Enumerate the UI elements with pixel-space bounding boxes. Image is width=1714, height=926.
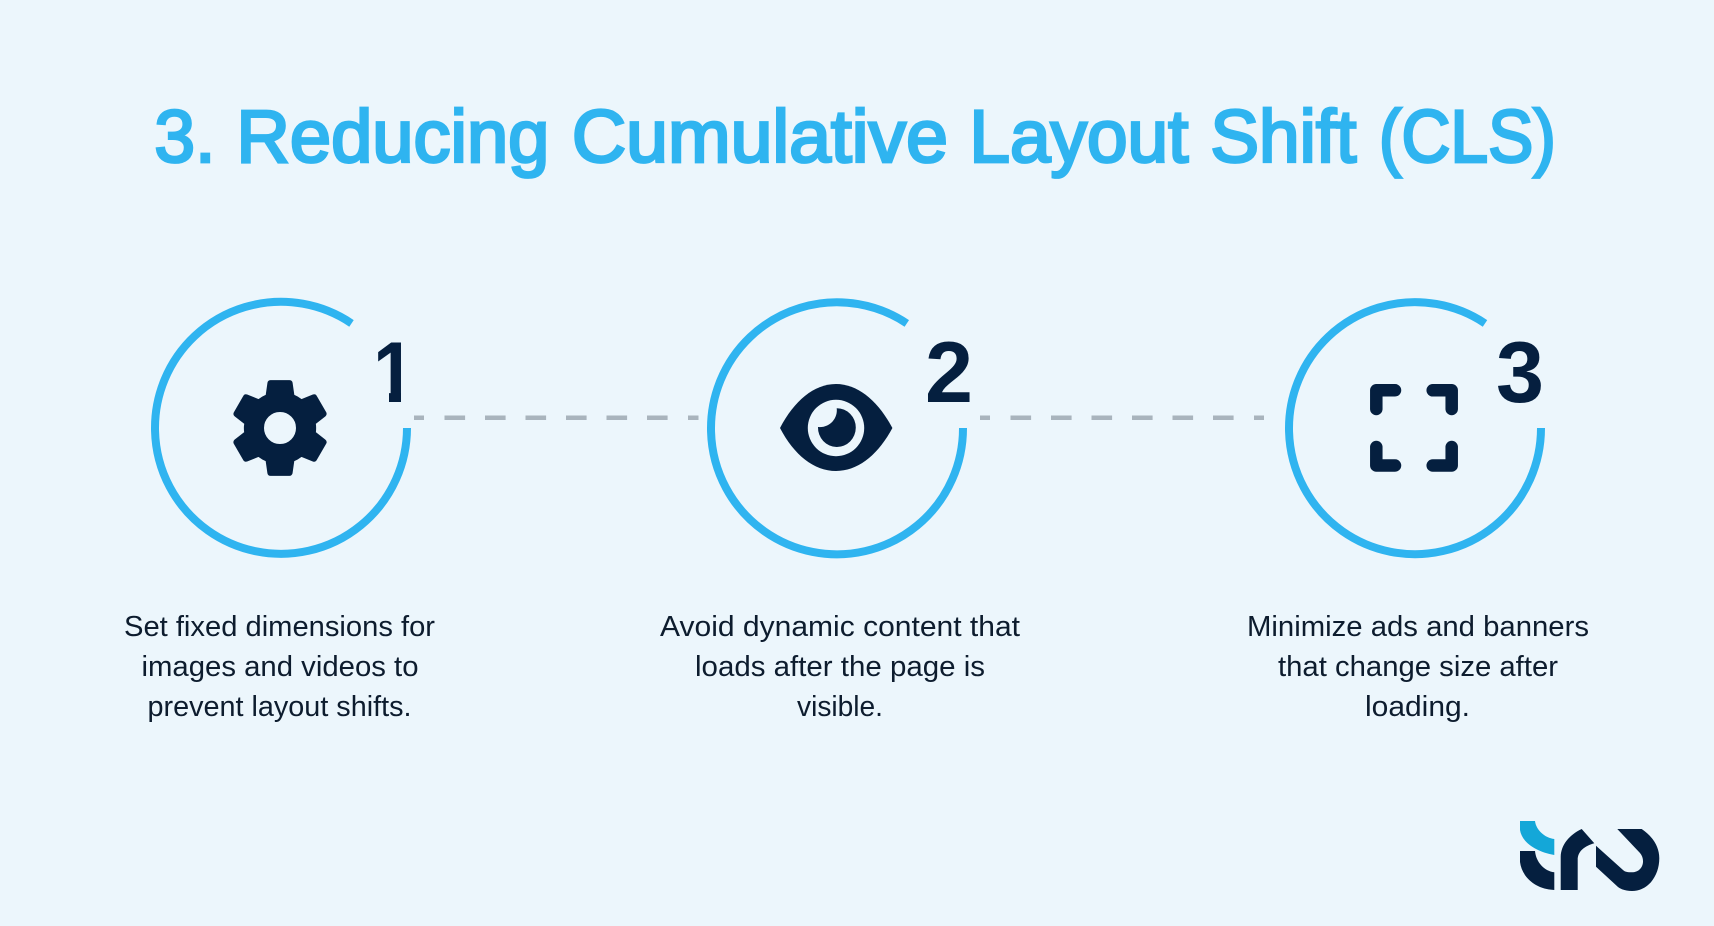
ring: step 2 xyxy=(711,302,963,554)
text: step 3 description: that change size after xyxy=(1278,651,1558,683)
text: step 2 description: visible. xyxy=(797,691,883,723)
title: Cumulative xyxy=(572,95,948,178)
text: step 1 description: Set fixed dimensions for xyxy=(124,611,435,643)
number 3: 3 xyxy=(1496,325,1544,421)
text: step 3 description: Minimize ads and banners xyxy=(1247,611,1589,643)
ring: step 3 xyxy=(1289,302,1541,554)
text: step 2 description: Avoid dynamic content that xyxy=(660,611,1020,643)
text: step 3 description xyxy=(1247,611,1589,723)
panel: step 2 xyxy=(660,302,1020,723)
connector: dashed line from step 1 to step 2 xyxy=(414,416,698,420)
number 2: 2 xyxy=(925,325,973,421)
title: Shift xyxy=(1210,95,1357,178)
title: 3. xyxy=(154,95,215,178)
icon: eye xyxy=(780,384,892,471)
text: step 2 description xyxy=(660,611,1020,723)
panel: step 3 xyxy=(1247,302,1589,723)
icon: gear xyxy=(234,381,326,475)
title: Layout xyxy=(969,95,1189,178)
number 1: 1 xyxy=(373,325,415,421)
text: step 2 description: loads after the page is xyxy=(695,651,985,683)
text: step 1 description: prevent layout shifts. xyxy=(148,691,412,723)
title: Reducing xyxy=(236,95,549,178)
text: step 1 description: images and videos to xyxy=(142,651,418,683)
logo xyxy=(1520,821,1659,891)
panel: step 1 xyxy=(124,302,435,723)
text: step 1 description xyxy=(124,611,435,723)
text: step 3 description: loading. xyxy=(1365,691,1470,723)
title xyxy=(154,95,1556,178)
icon: frame corners xyxy=(1376,390,1452,466)
ring: step 1 xyxy=(155,302,407,554)
title: (CLS) xyxy=(1379,95,1556,178)
connector: dashed line from step 2 to step 3 xyxy=(980,416,1264,420)
